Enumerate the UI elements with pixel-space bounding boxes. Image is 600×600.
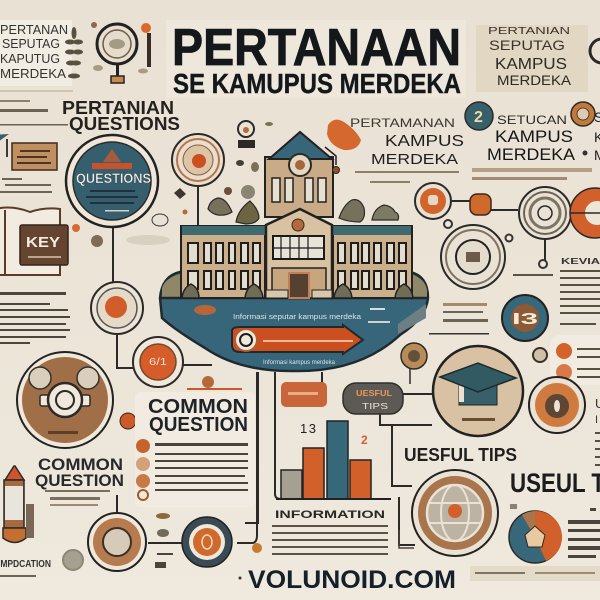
circle: number 13 badge (502, 295, 548, 341)
text: useul t (510, 396, 600, 498)
orange blob and text: kampus merdeka (327, 118, 464, 183)
text block: information (272, 509, 388, 555)
heading: pertanian questions: QUESTIONS (69, 114, 180, 134)
circle: dark gear badge (182, 517, 232, 567)
orange blob and text: kampus merdeka: MERDEKA (371, 152, 458, 168)
text block: left small label (0, 100, 68, 193)
text block: implication (0, 558, 51, 577)
panel: common question: COMMON (148, 396, 248, 418)
title: PERTANAAN (172, 19, 461, 77)
island caption (194, 305, 390, 323)
panel: top-right note (476, 25, 588, 92)
circle: number 13 badge: I3 (512, 311, 538, 328)
circle: archive ring (441, 225, 505, 289)
panel: top-left text: PERTANAN (0, 23, 68, 37)
small bottom icons (155, 513, 262, 580)
connector lines (113, 187, 545, 545)
text block: lower right (510, 504, 600, 558)
bar chart: 13 (300, 421, 316, 436)
bar chart: 2 (361, 433, 368, 447)
orange blob and text: kampus merdeka: KAMPUS (385, 133, 464, 150)
heading: pertanian questions (62, 98, 180, 134)
text: setucan kampus merdeka: KAMPUS (495, 128, 573, 146)
text: setucan kampus merdeka (472, 113, 592, 180)
icon: brown medallion with stem (401, 343, 427, 384)
tag: useful tips pill (343, 383, 403, 414)
island caption: Informasi seputar kampus merdeka (233, 314, 361, 321)
panel: common question: QUESTION (149, 414, 248, 436)
node chain: orange ring (415, 183, 451, 219)
circle: concentric target (519, 187, 571, 239)
shrubs (182, 284, 413, 298)
tag: useful tips pill: UESFUL (356, 389, 392, 398)
circle: orange swirl (529, 377, 585, 433)
icon: right edge ring (590, 39, 600, 63)
circle: small orange badge top right (571, 102, 595, 126)
circle: upper connector badge (91, 282, 143, 334)
footer strip (470, 566, 600, 581)
number badge 2 (465, 102, 493, 130)
icon: bracket stem (399, 530, 414, 548)
icon: orange dot with stem (120, 413, 148, 429)
icon: graduation cap left (0, 134, 9, 157)
icon: rocket (3, 466, 34, 542)
panel: top-right note: MERDEKA (497, 72, 572, 88)
right edge letters (594, 109, 600, 163)
circle: bottom medallion (88, 513, 146, 571)
panel: top-left text: MERDEKA (0, 67, 67, 81)
panel: top-left text: SEPUTAG (2, 37, 60, 51)
text: setucan kampus merdeka: MERDEKA (487, 146, 575, 164)
circle: orange badge (133, 337, 183, 387)
heading: useful tips: UESFUL TIPS (404, 445, 517, 465)
text: setucan kampus merdeka: SETUCAN (497, 113, 567, 127)
heading: common question left (35, 455, 124, 506)
circle: small grey (63, 550, 83, 570)
panel: top-left text: KAPUTUG (0, 52, 60, 66)
arrow banner (232, 325, 363, 354)
icon: magnifying glass (91, 22, 151, 83)
bar chart (276, 421, 391, 499)
left wing (181, 226, 265, 298)
text block: small note (429, 303, 489, 334)
note card (12, 143, 57, 170)
circle: questions badge: QUESTIONS (76, 171, 151, 186)
island base (160, 272, 428, 371)
text block: kevia (513, 256, 600, 325)
book with key label: KEY (26, 234, 60, 251)
lower caption: Informasi kampus merdeka (263, 360, 336, 366)
small ring icons (444, 220, 547, 268)
circle: graduation cap (433, 346, 523, 436)
node chain: orange rounded square (470, 194, 491, 215)
circle: questions badge (66, 135, 158, 227)
heading: common question left: COMMON (38, 455, 123, 474)
circle: orange target (172, 134, 224, 186)
number badge 2: 2 (474, 109, 483, 126)
circle: orange badge: 6/1 (149, 357, 168, 368)
title: SE KAMUPUS MERDEKA (173, 68, 461, 99)
right wing (333, 226, 412, 298)
panel: top-right note: SEPUTAG (489, 37, 565, 53)
circle: globe (412, 470, 498, 556)
text block: left column (0, 292, 70, 344)
circle: brown badge (17, 352, 113, 448)
icon: small medal (533, 348, 547, 362)
text block: kevia: KEVIA (561, 256, 600, 266)
book with key label (0, 208, 68, 275)
footer url: VOLUNOID.COM (248, 566, 456, 594)
panel: common question (135, 376, 255, 507)
text: useul t: I (595, 414, 598, 426)
center block (266, 209, 332, 298)
icon: trees behind building (208, 198, 399, 224)
panel: top-left text (0, 20, 73, 91)
heading: common question left: QUESTION (35, 471, 124, 490)
small decor icons (72, 122, 273, 247)
panel: top-right note: PERTANIAN (488, 25, 570, 37)
icon: person top (238, 121, 255, 148)
panel: top-right note: KAMPUS (495, 56, 567, 73)
icon: laurel branch (65, 27, 83, 78)
panel: tips list (550, 335, 600, 385)
circle: orange ring right edge (570, 188, 600, 238)
title (166, 19, 466, 99)
orange blob and text: kampus merdeka: PERTAMANAN (350, 118, 455, 130)
tag: orange pill (281, 382, 327, 407)
building on teal island (160, 132, 428, 371)
heading: pertanian questions: PERTANIAN (62, 98, 174, 118)
tower (265, 132, 340, 217)
pie chart badge (509, 511, 562, 563)
tag: useful tips pill: TIPS (362, 402, 388, 411)
text block: information: INFORMATION (275, 509, 385, 521)
